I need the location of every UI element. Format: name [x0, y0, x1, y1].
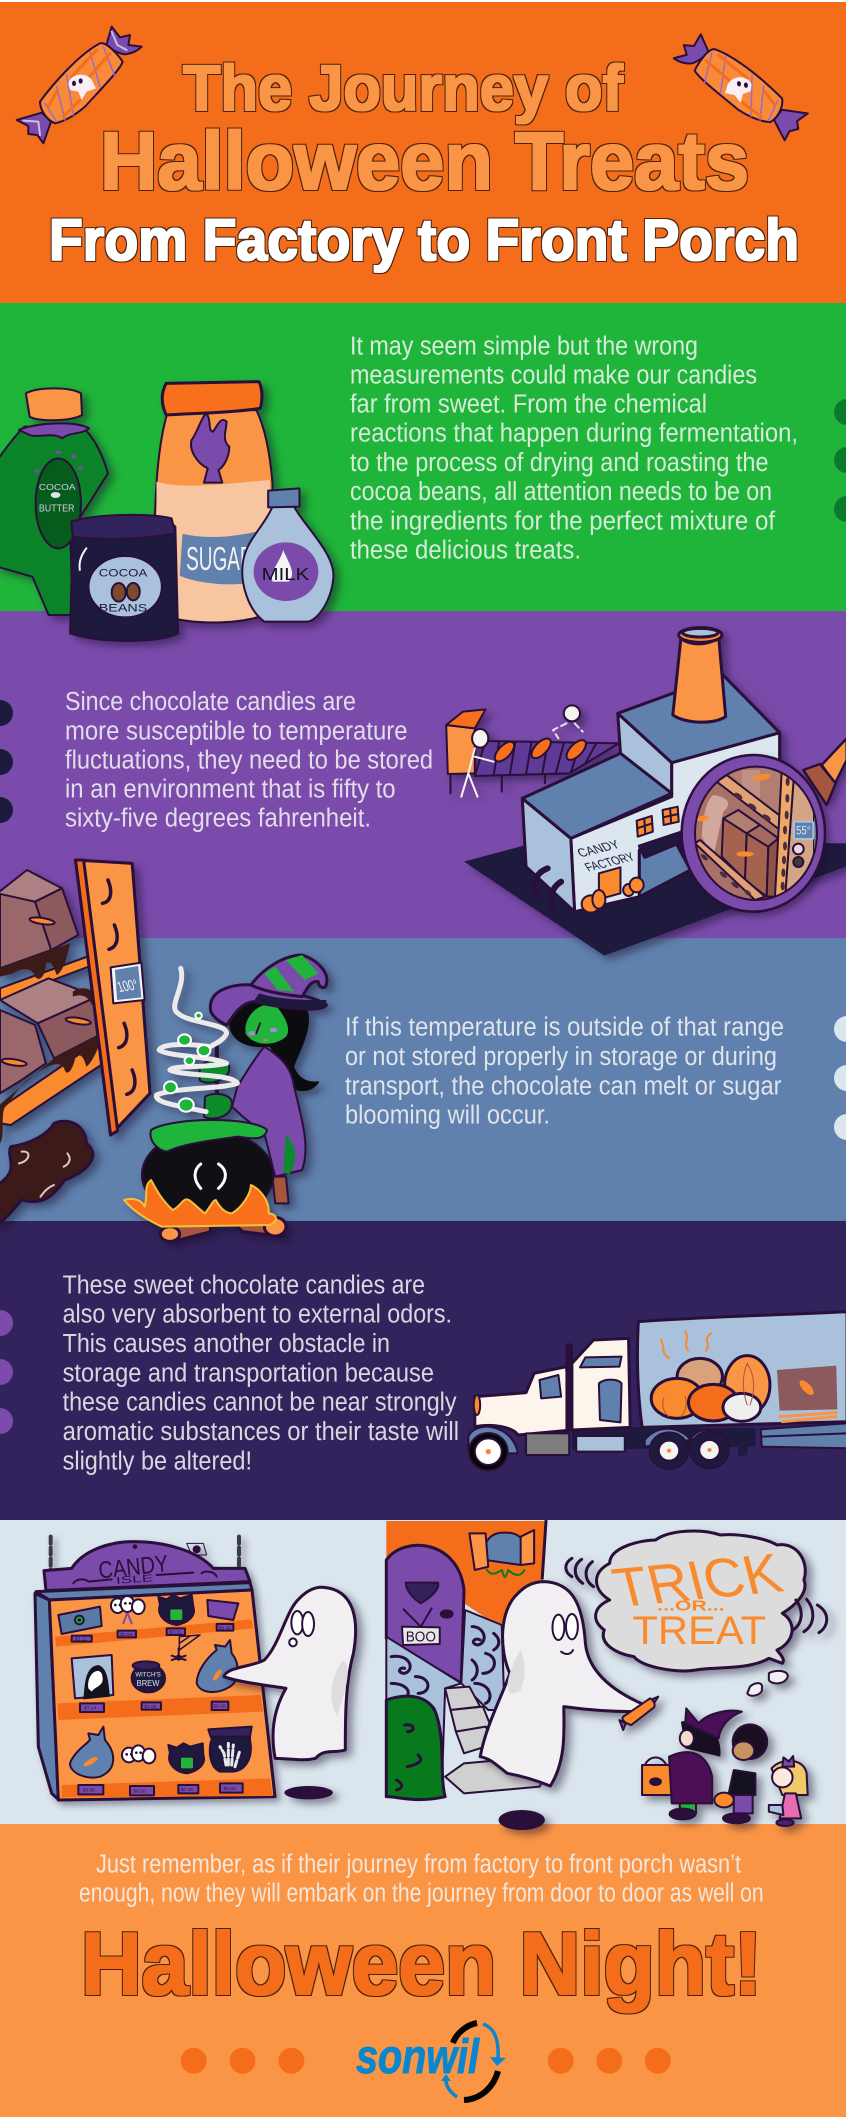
back panel [49, 1590, 275, 1800]
price labels: $5.00 [213, 1704, 226, 1710]
trailer [637, 1312, 846, 1427]
panel: ingredients band [0, 303, 846, 611]
price tags [72, 1624, 243, 1795]
price labels: $0.50 [120, 1632, 133, 1638]
text: transport: This causes another obstacle in [63, 1330, 390, 1358]
icon: left candy [17, 27, 142, 143]
shelf upright [76, 860, 150, 1135]
price labels: $0.50 [133, 1789, 146, 1795]
text: storage: or not stored properly in storage or during [345, 1043, 777, 1071]
illustration: magnifying glass: 55° [796, 823, 811, 837]
panel: storage band [0, 938, 846, 1221]
callout: trick or treat thought bubble [566, 1531, 827, 1696]
green cocoa butter bottle: BUTTER [39, 503, 75, 514]
text: ingredients: far from sweet. From the chemical [350, 391, 707, 419]
bubbles [164, 1013, 210, 1112]
illustration: magnifying glass [682, 738, 846, 912]
side dots: transport [0, 1310, 13, 1434]
witch child [642, 1708, 742, 1819]
smoke swirl [156, 968, 237, 1112]
porch candy [619, 1697, 658, 1730]
title: The Journey of [183, 52, 624, 124]
left railing [386, 1637, 461, 1770]
frankenstein candy pot bottom [168, 1743, 204, 1773]
ghost box [72, 1655, 113, 1699]
text: factory: sixty-five degrees fahrenheit. [65, 805, 371, 833]
illustration: melting shelves [0, 860, 150, 1227]
text: transport: these candies cannot be near strongly [63, 1389, 457, 1417]
lens outline [695, 767, 817, 900]
cocoa beans jar [70, 515, 178, 641]
cargo box [777, 1366, 837, 1411]
text: closing message [79, 1850, 764, 1908]
milk bottle: MILK [262, 564, 310, 584]
illustration: trick or treaters [642, 1708, 808, 1826]
text: storage: blooming will occur. [345, 1101, 550, 1129]
chocolate highlight [19, 1152, 70, 1197]
price labels: $5.00 [83, 1788, 95, 1794]
cab [572, 1338, 630, 1430]
text: ingredients: to the process of drying and roasting the [350, 449, 768, 477]
price labels: $1.11 [75, 1637, 87, 1643]
skull lollipops bottom [122, 1745, 155, 1763]
candy bag bottom [70, 1727, 113, 1778]
side dots: storage [834, 1016, 846, 1140]
illustration: delivery truck [468, 1312, 846, 1470]
hair [229, 999, 319, 1091]
text: transport: storage and transportation because [63, 1359, 434, 1387]
callout: trick or treat thought bubble: ...OR... [657, 1598, 725, 1614]
heading: Halloween Night: Halloween Night! [81, 1914, 762, 2013]
skeleton workers [461, 705, 583, 797]
frankenstein candy pot top [158, 1595, 194, 1625]
title [49, 52, 799, 273]
illustration: porch ghost [480, 1582, 658, 1830]
face [245, 1004, 288, 1044]
factory sign: FACTORY [582, 850, 638, 874]
lens view [696, 768, 816, 899]
panel: footer band [0, 1824, 846, 2117]
text: transport [63, 1271, 459, 1475]
text: factory: fluctuations, they need to be stored [65, 746, 433, 774]
side dots: ingredients [834, 399, 846, 522]
chocolate blob [0, 1121, 93, 1227]
purple candy box [207, 1600, 238, 1620]
leg [272, 1177, 289, 1203]
title: From Factory to Front Porch [49, 208, 799, 273]
logo: sonwil: sonwil [356, 2031, 480, 2084]
purple door [386, 1545, 464, 1683]
factory sign: CANDY [574, 838, 623, 860]
bush [386, 1696, 445, 1800]
text: closing message: Just remember, as if their journey from factory to front porch wasn’t [96, 1850, 741, 1878]
temperature display [794, 822, 813, 839]
text: ingredients: the ingredients for the perfect mixture of [350, 507, 776, 535]
icon: right candy [671, 21, 811, 154]
cocoa beans jar: COCOA [99, 567, 148, 580]
tentacles [534, 868, 561, 908]
spider on sign [187, 1543, 207, 1555]
text: ingredients: It may seem simple but the wrong [350, 332, 698, 360]
text: factory: Since chocolate candies are [65, 688, 356, 716]
candy bag middle [197, 1640, 238, 1692]
factory sign [573, 836, 638, 874]
text: transport: These sweet chocolate candies are [63, 1271, 425, 1299]
eye candy box [58, 1607, 102, 1634]
side dots: factory [0, 700, 13, 823]
stirring stick and hands [215, 1047, 219, 1133]
landing gear [738, 1428, 747, 1456]
panel: header band [0, 2, 846, 303]
text: factory [65, 688, 433, 833]
stairs [445, 1687, 542, 1793]
witch's brew cauldron: BREW [137, 1678, 160, 1688]
price labels: $7.14 [84, 1706, 97, 1712]
price labels: $6.00 [223, 1786, 236, 1792]
fire [124, 1180, 276, 1227]
text: storage: transport, the chocolate can melt or sugar [345, 1072, 782, 1100]
panel: transport band [0, 1221, 846, 1520]
cocoa beans jar: BEANS [99, 602, 147, 615]
low block [522, 753, 691, 912]
illustration: aisle ghost [224, 1587, 356, 1799]
title: Halloween Treats [100, 116, 749, 207]
step and fuel tank [526, 1433, 569, 1455]
text: ingredients: reactions that happen during fermentation, [350, 420, 798, 448]
chocolate drips [0, 943, 103, 1143]
illustration: candy factory [446, 628, 846, 956]
boo sign: BOO [406, 1629, 436, 1645]
chimney [673, 628, 726, 722]
girl [769, 1756, 808, 1826]
green cocoa butter bottle: COCOA [39, 483, 76, 492]
wheel arches [468, 1427, 518, 1453]
wheels [469, 1432, 729, 1470]
window [469, 1530, 534, 1577]
milk bottle [242, 488, 333, 622]
windows [637, 807, 679, 837]
witch's brew cauldron [132, 1661, 165, 1692]
boo sign [402, 1608, 440, 1645]
panel: factory band [0, 611, 846, 939]
price labels: $0.35 [181, 1787, 193, 1793]
callout: trick or treat thought bubble: TREAT [632, 1608, 766, 1653]
text: transport: aromatic substances or their taste will [63, 1418, 459, 1446]
sound arcs [566, 1558, 827, 1633]
text: transport: slightly be altered! [63, 1447, 252, 1475]
web and spider [172, 1635, 200, 1661]
chassis [572, 1427, 755, 1450]
panel: shop and porch band [0, 1520, 846, 1824]
hat [210, 985, 326, 1025]
pumpkins cargo [651, 1356, 770, 1421]
pallet [780, 1413, 836, 1422]
boy [714, 1724, 767, 1823]
indicator lights [793, 844, 804, 867]
logs [160, 1217, 286, 1242]
sign [44, 1542, 250, 1591]
temperature sign: 100° [115, 977, 141, 996]
conveyor [446, 709, 619, 793]
witch's brew cauldron: WITCH'S [135, 1673, 161, 1679]
right railing [461, 1610, 504, 1710]
skull lollipops top [111, 1596, 145, 1623]
temperature sign [111, 963, 145, 1003]
dress [232, 1047, 305, 1177]
price labels: $2.05 [144, 1704, 157, 1710]
small thought puffs [769, 1671, 788, 1683]
footer dots right [548, 2048, 671, 2074]
footer dots left [181, 2048, 304, 2074]
price labels: $0.31 [169, 1630, 182, 1636]
pumpkins [582, 878, 644, 913]
logo: sonwil [356, 2023, 506, 2100]
text: ingredients [350, 332, 798, 564]
ghost shadow [284, 1786, 333, 1799]
illustration: ingredient jars [0, 382, 333, 641]
text: factory: more susceptible to temperature [65, 717, 408, 745]
sugar jar [154, 382, 272, 622]
illustration: witch and cauldron [124, 955, 327, 1242]
text: ingredients: measurements could make our candies [350, 361, 757, 389]
price labels [75, 1625, 236, 1795]
illustration: ingredient jars: SUGAR [186, 540, 254, 577]
frame [36, 1583, 252, 1600]
text: ingredients: cocoa beans, all attention needs to be on [350, 478, 772, 506]
illustration: candy aisle: ISLE [116, 1573, 154, 1587]
porch ghost shadow [499, 1810, 545, 1830]
boxes [0, 870, 103, 1093]
door [599, 867, 620, 899]
text: factory: in an environment that is fifty to [65, 776, 396, 804]
tall block [571, 675, 780, 912]
text: ingredients: these delicious treats. [350, 536, 581, 564]
orange wall [386, 1521, 546, 1627]
illustration: haunted house porch [386, 1521, 546, 1800]
lower and upper shelf bars [0, 955, 93, 1000]
text: storage: If this temperature is outside of that range [345, 1014, 784, 1042]
ground [464, 840, 846, 956]
ring [682, 755, 825, 912]
text: storage [345, 1014, 784, 1129]
price labels: $5.00 [219, 1625, 231, 1631]
odor squiggles [661, 1332, 711, 1358]
illustration: candy aisle: CANDY [97, 1550, 170, 1585]
handle [822, 738, 846, 783]
exhaust stack [565, 1343, 573, 1431]
shelf stripes [55, 1619, 273, 1797]
cauldron [142, 1130, 274, 1220]
illustration: candy aisle [35, 1537, 275, 1800]
text: transport: also very absorbent to external odors. [63, 1301, 452, 1329]
bones jar [208, 1727, 252, 1772]
conveyor candies [491, 737, 590, 763]
green cocoa butter bottle [0, 388, 108, 615]
chains [51, 1537, 239, 1571]
